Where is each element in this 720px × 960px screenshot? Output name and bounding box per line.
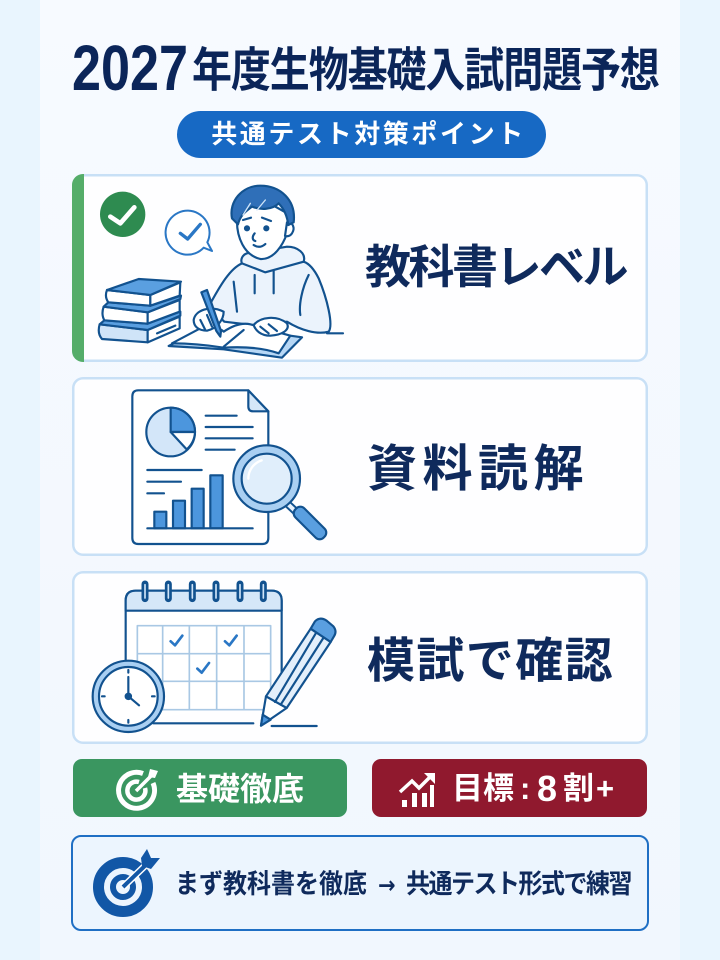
figure: hands and pen: [193, 290, 287, 337]
callout text: まず教科書を徹底: [175, 869, 367, 900]
figure: open notebook: [168, 324, 302, 358]
green accent bar: [72, 174, 84, 362]
badge: target 80 percent: 割: [563, 771, 594, 806]
callout: study strategy: [71, 835, 649, 931]
text lines: [147, 416, 253, 494]
panel: data reading: [72, 377, 648, 556]
icon: rising chart: [398, 773, 435, 807]
callout: study strategy: 共通テスト形式で練習: [406, 869, 631, 900]
badge: target 80 percent: :: [520, 771, 530, 806]
illustration: document and magnifier: [131, 389, 328, 546]
illustration: student studying with books: [98, 184, 344, 359]
illustration: calendar clock pencil: [92, 580, 337, 734]
label: textbook level: 教科書レベル: [365, 241, 626, 293]
icon: green check badge: [100, 192, 145, 237]
label: data reading: 資料読解: [367, 441, 589, 497]
badge: target 80 percent: +: [596, 771, 614, 806]
icon: speech bubble check: [165, 211, 212, 255]
check marks: [171, 636, 237, 673]
panel: mock exam check: [72, 571, 648, 744]
pie chart: [146, 408, 195, 457]
callout text: [175, 869, 631, 900]
title words: 年度生物基礎入試問題予想: [192, 45, 659, 97]
icon: stack of books: [98, 279, 181, 342]
subtitle pill: 共通テスト対策ポイント: [211, 119, 526, 149]
icon: clock: [93, 661, 164, 732]
badge: basics: [73, 759, 347, 817]
badge text: 目標: [452, 771, 514, 806]
calendar: [126, 584, 317, 726]
label: mock exam check: 模試で確認: [367, 635, 614, 688]
icon: pencil: [261, 619, 336, 726]
icon: white target: [116, 769, 158, 811]
badge text: [452, 768, 614, 809]
icon: blue target with arrow: [93, 849, 160, 917]
bar chart: [147, 476, 253, 529]
panel: textbook level: [72, 174, 648, 362]
title: [72, 32, 659, 104]
badge: target 80 percent: [372, 759, 647, 817]
title year: 2027: [72, 32, 188, 104]
icon: magnifying glass: [233, 446, 329, 542]
badge text: 基礎徹底: [176, 771, 304, 807]
callout: study strategy: →: [378, 872, 396, 898]
document sheet: [132, 391, 268, 544]
subtitle pill: [177, 111, 546, 158]
figure: student in hoodie: [208, 186, 343, 333]
badge: target 80 percent: 8: [537, 768, 557, 809]
